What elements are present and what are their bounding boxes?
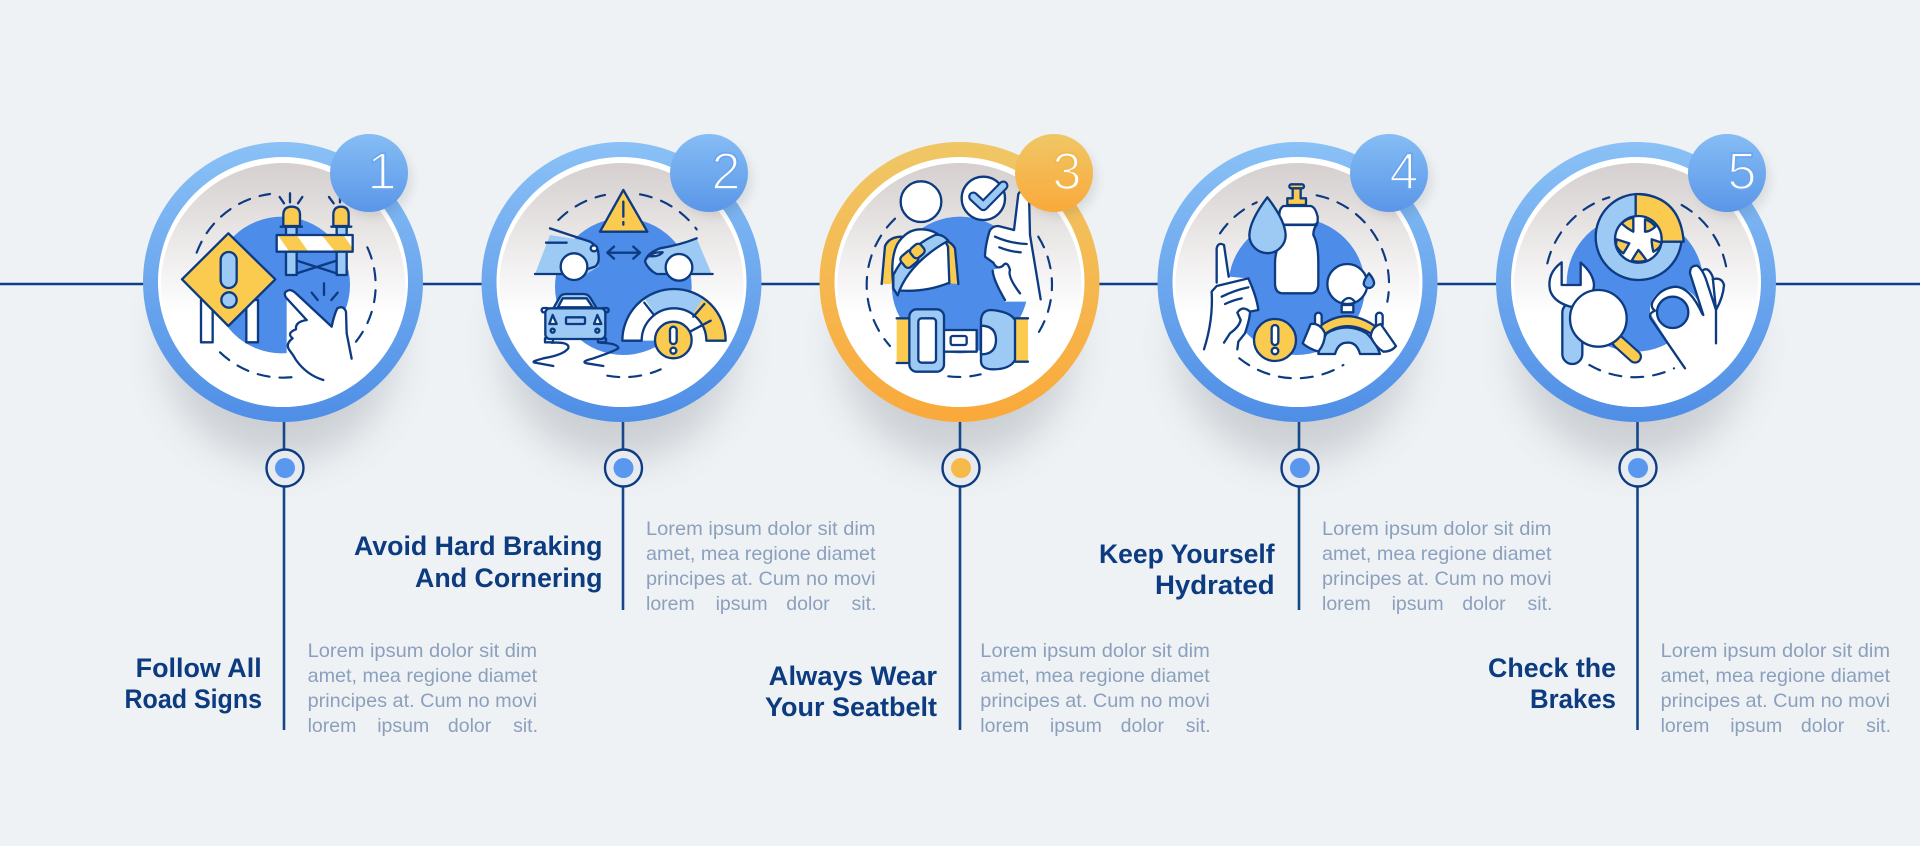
body text 2: Lorem ipsum dolor sit dim (646, 518, 876, 540)
timeline marker 5 (1620, 450, 1656, 486)
number badge 3 (1015, 134, 1093, 212)
icon: road signs, barrier and pointing hand (182, 193, 376, 383)
icon: wheel, wrench, magnifier and OK hand (1547, 194, 1727, 377)
icon: water bottle, drop, hand and driver (1204, 184, 1396, 378)
step 4 panel: keep yourself hydrated (1099, 134, 1552, 615)
body text 3: sit. (1186, 715, 1211, 737)
title 1 (124, 653, 262, 714)
body text 5: Lorem ipsum dolor sit dim (1661, 640, 1890, 662)
body text 3: dolor (1121, 715, 1164, 737)
outer ring 3 (820, 142, 1100, 422)
number badge 4 (1350, 134, 1428, 212)
body text 1: principes at. Cum no movi (308, 690, 537, 712)
body text 1: lorem (308, 715, 356, 737)
number badge 3: 3 (1053, 143, 1081, 201)
connector stem 2 (622, 422, 624, 610)
inner disc 4 (1172, 157, 1422, 407)
connector stem 3 (959, 422, 961, 730)
number badge 2: 2 (712, 143, 740, 201)
soft shadow 5 (1517, 229, 1749, 461)
inner disc 2 (496, 157, 746, 407)
body text 3: principes at. Cum no movi (980, 690, 1210, 712)
title 3: Always Wear (769, 661, 937, 691)
body text 1: sit. (513, 715, 538, 737)
body text 5: principes at. Cum no movi (1661, 690, 1890, 712)
body text 5: lorem (1661, 715, 1709, 737)
timeline marker 4 (1282, 450, 1318, 486)
connector stem 4 (1298, 422, 1300, 610)
title 4 (1099, 539, 1275, 600)
title 5: Check the (1488, 653, 1616, 683)
step 3 panel: always wear your seatbelt (765, 134, 1211, 737)
outer ring 5 (1496, 142, 1776, 422)
outer ring 4 (1158, 142, 1438, 422)
body text 5: ipsum (1730, 715, 1782, 737)
body text 4: ipsum (1392, 593, 1444, 615)
body text 5 (1661, 640, 1891, 737)
number badge 1: 1 (368, 143, 396, 201)
title 5 (1488, 653, 1616, 714)
title 3 (765, 661, 937, 722)
number badge 1 (330, 134, 408, 212)
body text 1 (308, 640, 538, 737)
soft shadow 2 (503, 229, 735, 461)
body text 4: dolor (1462, 593, 1506, 615)
body text 2: sit. (852, 593, 876, 615)
timeline marker 1 (266, 450, 304, 486)
body text 1: ipsum (377, 715, 429, 737)
body text 1: amet, mea regione diamet (308, 665, 538, 687)
body text 2: principes at. Cum no movi (646, 568, 876, 590)
title 3: Your Seatbelt (765, 692, 937, 722)
inner disc 5 (1511, 157, 1761, 407)
title 4: Hydrated (1155, 570, 1275, 600)
number badge 4: 4 (1390, 143, 1418, 201)
connector stem 5 (1636, 422, 1639, 730)
step 1 panel: follow all road signs (124, 134, 538, 737)
step 5 panel: check the brakes (1488, 134, 1891, 737)
title 5: Brakes (1530, 684, 1616, 714)
body text 4 (1322, 518, 1552, 615)
icon: person with seatbelt, raised finger and buckle (867, 177, 1052, 377)
body text 1: Lorem ipsum dolor sit dim (308, 640, 537, 662)
outer ring 1 (143, 142, 423, 422)
title 4: Keep Yourself (1099, 539, 1275, 569)
title 2 (354, 531, 602, 593)
body text 4: amet, mea regione diamet (1322, 543, 1552, 565)
inner disc 3 (834, 157, 1084, 407)
title 1: Road Signs (124, 684, 262, 714)
horizontal timeline line (0, 283, 1920, 285)
body text 2: amet, mea regione diamet (646, 543, 876, 565)
title 1: Follow All (136, 653, 262, 683)
icon: cars, warning triangle and speedometer (534, 190, 726, 377)
body text 4: lorem (1322, 593, 1371, 615)
body text 3: Lorem ipsum dolor sit dim (980, 640, 1210, 662)
title 2: Avoid Hard Braking (354, 531, 602, 561)
connector stem 1 (283, 422, 285, 730)
body text 3 (980, 640, 1211, 737)
body text 3: lorem (980, 715, 1029, 737)
body text 5: sit. (1866, 715, 1891, 737)
badge shadow 1 (338, 143, 412, 217)
title 2: And Cornering (415, 563, 602, 593)
body text 5: dolor (1801, 715, 1845, 737)
inner disc 1 (158, 157, 408, 407)
timeline marker 3 (942, 450, 980, 486)
number badge 5 (1688, 134, 1766, 212)
badge shadow 2 (678, 143, 752, 217)
badge shadow 4 (1358, 143, 1432, 217)
body text 5: amet, mea regione diamet (1661, 665, 1891, 687)
soft shadow 3 (841, 229, 1073, 461)
number badge 2 (670, 134, 748, 212)
timeline marker 2 (605, 450, 642, 486)
body text 3: ipsum (1050, 715, 1102, 737)
outer ring 2 (482, 142, 762, 422)
soft shadow 1 (164, 229, 396, 461)
badge shadow 5 (1696, 143, 1770, 217)
number badge 5: 5 (1728, 143, 1756, 201)
badge shadow 3 (1023, 143, 1097, 217)
body text 4: Lorem ipsum dolor sit dim (1322, 518, 1552, 540)
step 2 panel: avoid hard braking and cornering (354, 134, 876, 615)
soft shadow 4 (1179, 229, 1411, 461)
body text 2: ipsum (716, 593, 768, 615)
body text 2: lorem (646, 593, 695, 615)
body text 4: sit. (1528, 593, 1552, 615)
body text 3: amet, mea regione diamet (980, 665, 1210, 687)
body text 2: dolor (786, 593, 830, 615)
body text 4: principes at. Cum no movi (1322, 568, 1552, 590)
body text 1: dolor (448, 715, 492, 737)
body text 2 (646, 518, 876, 615)
